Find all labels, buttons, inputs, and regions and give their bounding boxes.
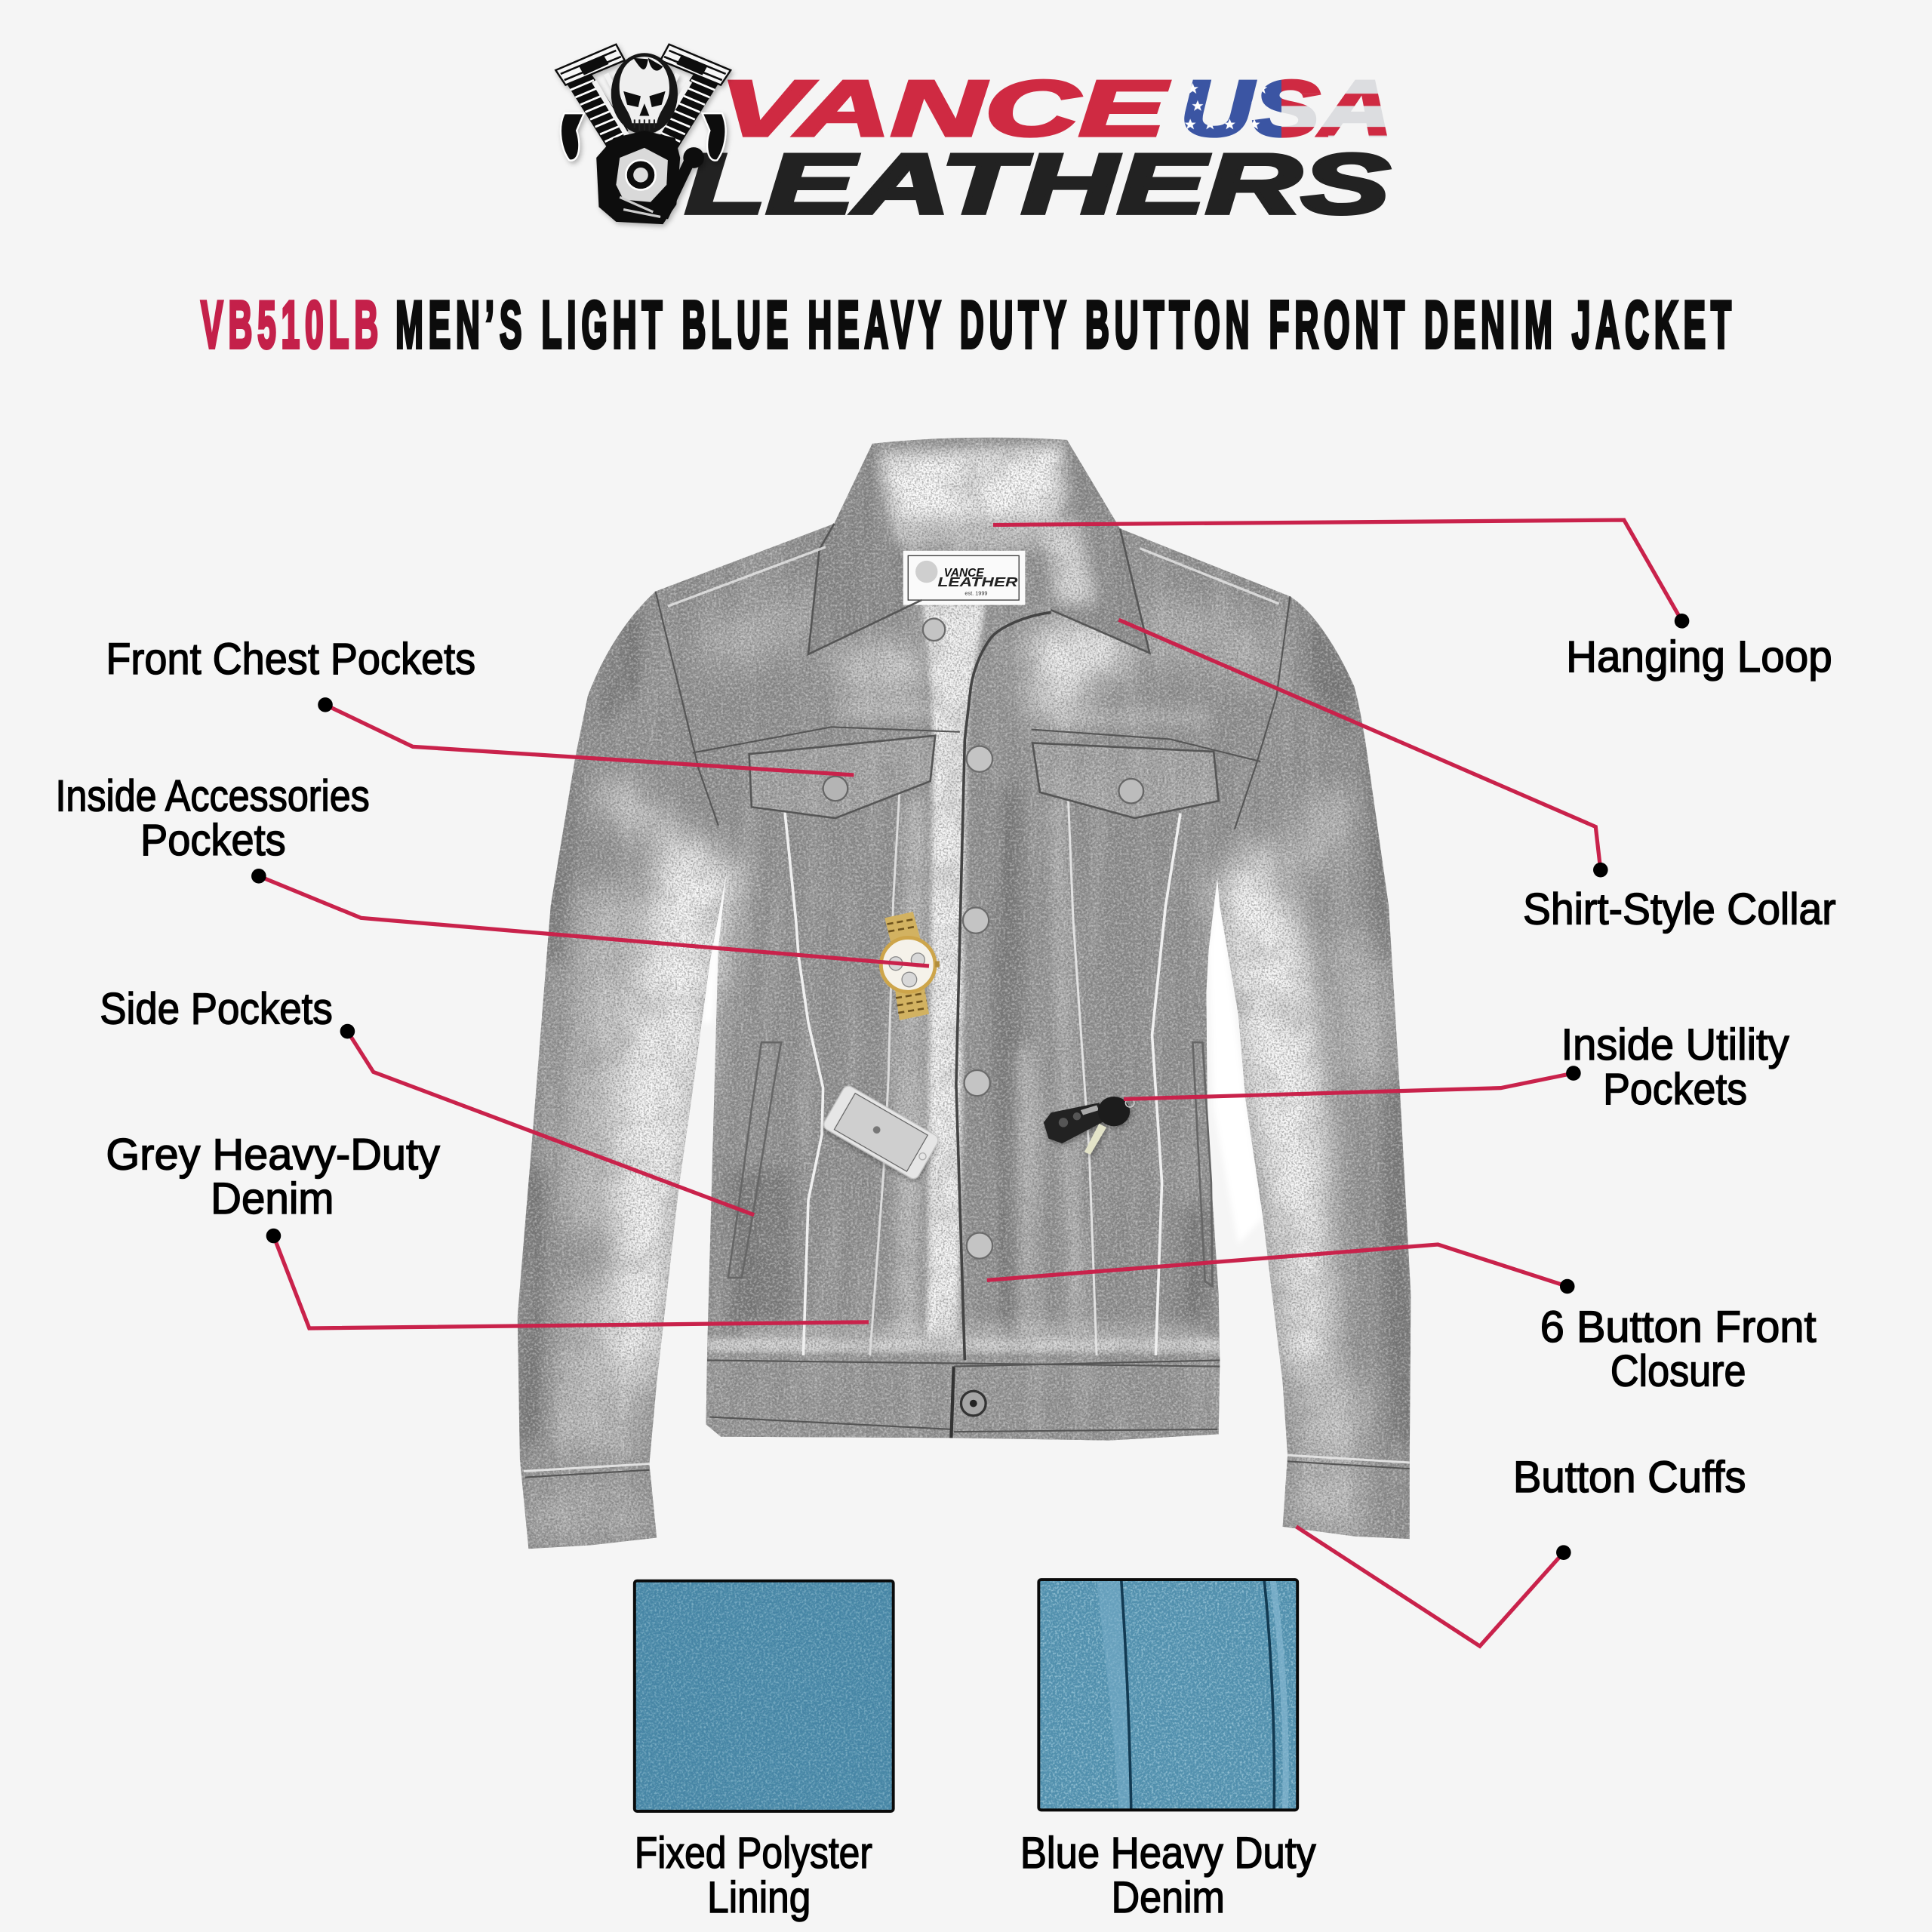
engine: left fins: [567, 74, 629, 150]
jacket: brand neck label: [903, 551, 1025, 605]
label: blue heavy duty denim: Denim: [1112, 1873, 1225, 1922]
jacket: cuffs: [524, 1455, 1410, 1478]
placket and hem highlights: [707, 647, 1223, 1353]
label: hanging loop: Hanging Loop: [1566, 632, 1832, 681]
jacket: brand neck label: VANCE: [944, 567, 984, 580]
logo wordmark VANCE: VANCE: [719, 65, 1170, 153]
label: inside utility pockets: [1561, 1020, 1789, 1114]
leader: front chest pockets: [318, 697, 854, 775]
swatch: blue heavy duty denim: [1038, 1580, 1297, 1810]
icon: car keys: [1044, 1097, 1134, 1155]
label: grey heavy-duty denim: Grey Heavy-Duty: [106, 1130, 440, 1179]
label: shirt-style collar: Shirt-Style Collar: [1523, 884, 1836, 934]
leader: inside accessories pockets: [251, 869, 929, 966]
engine: pushrods: [594, 74, 690, 138]
leader: inside utility pockets: [1124, 1066, 1581, 1099]
neck interior fill: [882, 446, 1065, 545]
pocket flaps fill: [749, 736, 935, 818]
label: fixed polyster lining: Lining: [707, 1873, 811, 1922]
jacket: underarm white gaps: [703, 870, 1263, 1244]
leader: grey heavy-duty denim: [266, 1229, 869, 1328]
label: inside accessories pockets: Pockets: [140, 816, 286, 865]
jacket illustration: [493, 419, 1441, 1577]
jacket: collar outlines: [808, 524, 1149, 654]
jacket: shell, shading and denim texture: [493, 419, 1441, 1577]
label: blue heavy duty denim: [1020, 1829, 1316, 1922]
label: front chest pockets: Front Chest Pockets: [106, 635, 475, 684]
jacket: side pockets: [728, 1042, 1213, 1286]
label: button cuffs: Button Cuffs: [1513, 1453, 1746, 1502]
jacket: buttons: [923, 619, 992, 1416]
engine: crankcase: [596, 131, 680, 224]
dark sleeve edges: [518, 604, 1414, 1441]
engine: right fins: [657, 74, 718, 150]
engine: left head: [555, 45, 625, 85]
label: grey heavy-duty denim: [106, 1130, 440, 1223]
jacket: brand neck label: est. 1999: [964, 590, 988, 597]
title: product code: VB510LB: [201, 288, 378, 361]
engine: right head: [660, 45, 731, 85]
label: inside accessories pockets: [55, 771, 370, 865]
icon: gold watch: [881, 912, 940, 1020]
leader: 6 button front closure: [987, 1244, 1575, 1294]
label: grey heavy-duty denim: Denim: [211, 1174, 334, 1223]
collar wings fill: [808, 444, 921, 654]
leader: side pockets: [340, 1024, 754, 1215]
leader: shirt-style collar: [1118, 620, 1608, 877]
hem band fill: [705, 1353, 1220, 1441]
icon: skull engine: [555, 45, 731, 224]
logo wordmark USA flag: USA: [1180, 65, 1392, 153]
logo: Vance Leathers USA: [555, 45, 1392, 231]
label: side pockets: Side Pockets: [100, 985, 333, 1034]
jacket: left chest pocket flap: [749, 736, 935, 818]
jacket: waist band stitching: [707, 1360, 1220, 1438]
leader: hanging loop: [993, 520, 1689, 629]
title: product name: MEN’S LIGHT BLUE HEAVY DUTY BUTTON FRONT DENIM JACKET: [395, 288, 1731, 361]
swatch: fixed polyester lining: [635, 1581, 894, 1811]
label: 6 button front closure: Closure: [1611, 1347, 1746, 1396]
label: 6 button front closure: [1540, 1303, 1817, 1396]
bright sleeve and chest patches: [530, 586, 1383, 1540]
label: inside utility pockets: Inside Utility: [1561, 1020, 1789, 1069]
jacket: right chest pocket flap: [1032, 743, 1219, 818]
jacket: seams and pleats: [656, 547, 1290, 1360]
label: fixed polyster lining: Fixed Polyster: [635, 1829, 872, 1878]
icon: smartphone: [822, 1084, 940, 1181]
engine: kick arm: [663, 147, 704, 217]
jacket: brand neck label: LEATHER: [937, 574, 1018, 589]
label: inside accessories pockets: Inside Accessories: [55, 771, 370, 820]
label: fixed polyster lining: [635, 1829, 872, 1922]
label: blue heavy duty denim: Blue Heavy Duty: [1020, 1829, 1316, 1878]
logo wordmark LEATHERS: LEATHERS: [685, 136, 1390, 231]
label: inside utility pockets: Pockets: [1603, 1065, 1747, 1114]
label: 6 button front closure: 6 Button Front: [1540, 1303, 1817, 1352]
leader: button cuffs: [1297, 1527, 1571, 1646]
engine: side pipes: [561, 113, 726, 161]
title: [201, 288, 1731, 361]
engine: skull: [611, 53, 678, 134]
callout leader lines: [251, 520, 1689, 1646]
